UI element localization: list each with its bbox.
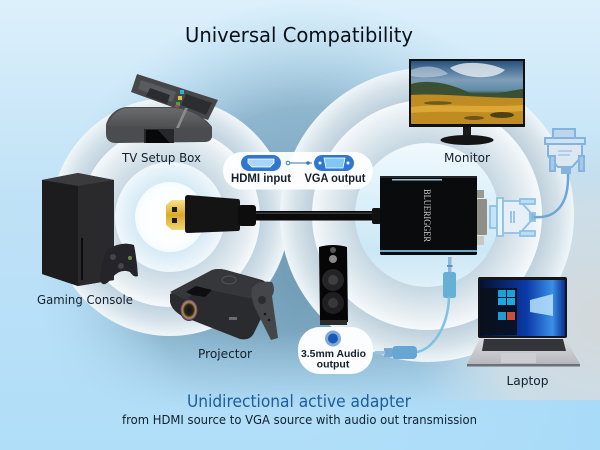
- audio cable with plugs: [375, 257, 456, 359]
- heading: unidirectional adapter: Unidirectional active adapter: [187, 392, 411, 411]
- VGA cable outline: [534, 174, 568, 217]
- device: gaming console: [37, 173, 138, 307]
- icon: audio jack: [325, 330, 341, 346]
- concentric signal circles: right: [280, 68, 574, 362]
- subheading: transmission description: from HDMI source to VGA source with audio out transmission: [122, 413, 477, 427]
- label: Gaming Console: Gaming Console: [37, 292, 133, 307]
- label: 3.5mm Audio output: output: [317, 358, 350, 370]
- label: 3.5mm Audio output: 3.5mm Audio: [301, 348, 366, 360]
- label: VGA output: VGA output: [304, 173, 366, 185]
- label: Monitor: Monitor: [444, 150, 491, 165]
- icon: set-top box: [106, 107, 212, 143]
- icon: HDMI port: [241, 155, 281, 171]
- label: brand name: BLUERIGGER: [421, 189, 431, 243]
- concentric signal circles: left: [51, 98, 289, 336]
- icon: VGA connector outline, horizontal: [490, 198, 535, 236]
- title: Universal Compatibility: [185, 23, 413, 47]
- icon: remote control: [131, 74, 218, 120]
- icon: VGA connector outline, vertical: [545, 129, 585, 173]
- port badge: HDMI input and VGA output: [223, 152, 373, 190]
- label: HDMI input: HDMI input: [231, 173, 291, 185]
- device: monitor: [409, 59, 525, 165]
- device: TV setup box: [106, 74, 218, 165]
- icon: HDMI plug: [166, 195, 256, 233]
- VGA adapter box: [372, 176, 487, 255]
- icon: game controller: [101, 244, 138, 284]
- label: TV Setup Box: TV Setup Box: [121, 150, 201, 165]
- audio output badge: [298, 327, 373, 374]
- label: Laptop: Laptop: [506, 373, 549, 388]
- HDMI cable: [166, 195, 375, 233]
- icon: VGA port: [314, 155, 354, 171]
- device: projector: [170, 269, 278, 361]
- caption: [122, 392, 477, 427]
- icon: projector remote: [251, 282, 278, 340]
- icon: speaker: [319, 245, 348, 325]
- device: laptop: [467, 277, 580, 388]
- label: Projector: Projector: [198, 346, 253, 361]
